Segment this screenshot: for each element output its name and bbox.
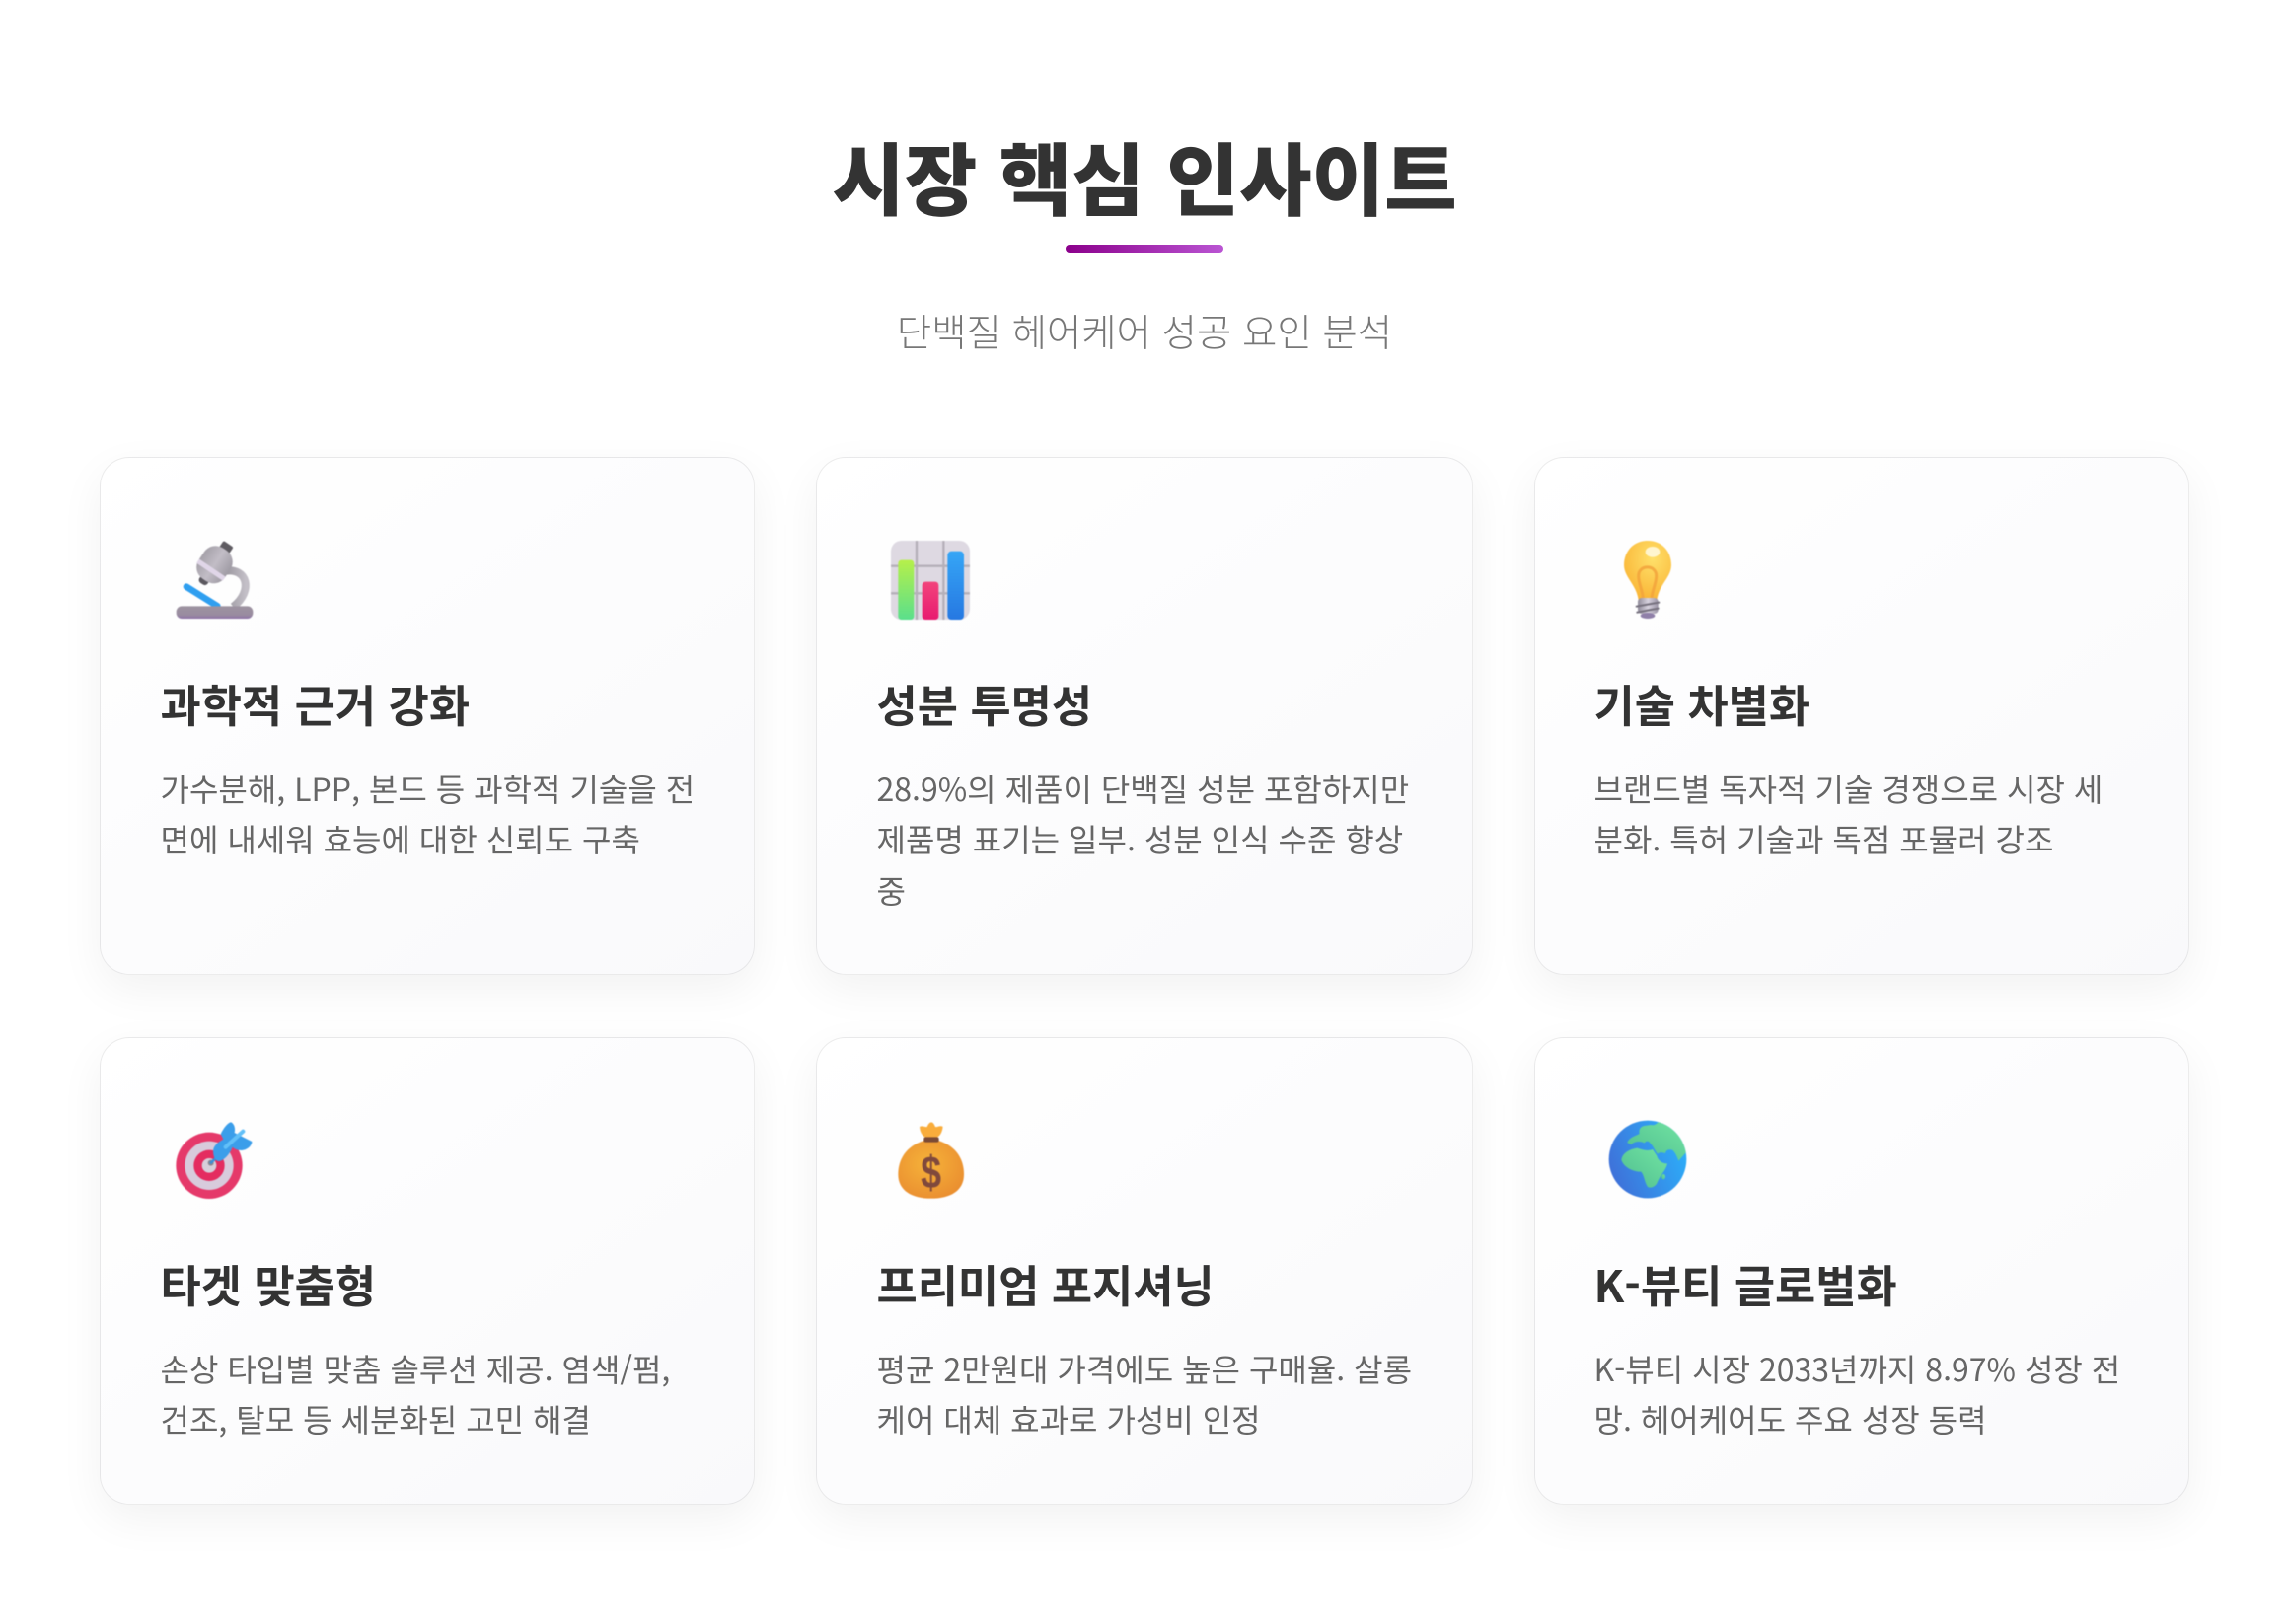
card heading: 과학적 근거 강화 [160,671,470,735]
card heading: 기술 차별화 [1594,671,1809,735]
card text [160,1346,670,1440]
card heading: 프리미엄 포지셔닝 [876,1251,1215,1315]
subtitle: 단백질 헤어케어 성공 요인 분석 [897,302,1392,357]
icon: bar chart [890,541,971,621]
panel: 성분 투명성 [816,457,1473,975]
panel: 타겟 맞춤형 [100,1037,755,1505]
icon: money bag [898,1121,965,1200]
card text: 브랜드별 독자적 기술 경쟁으로 시장 세 [1594,766,2103,811]
card text: 손상 타입별 맞춤 솔루션 제공. 염색/펌, [160,1346,670,1391]
icon: money bag: $ [922,1146,941,1198]
card text: K-뷰티 시장 2033년까지 8.97% 성장 전 [1594,1346,2120,1391]
panel: 과학적 근거 강화 [100,457,755,975]
card text: 면에 내세워 효능에 대한 신뢰도 구축 [160,816,640,861]
card text [160,766,695,861]
card heading: 성분 투명성 [876,671,1092,735]
panel: 프리미엄 포지셔닝 [816,1037,1473,1505]
card text [876,766,1409,913]
title: 시장 핵심 인사이트 [832,118,1457,233]
card text: 평균 2만원대 가격에도 높은 구매율. 살롱 [876,1346,1412,1391]
card text: 가수분해, LPP, 본드 등 과학적 기술을 전 [160,766,695,811]
icon: microscope [176,541,254,620]
card heading: 타겟 맞춤형 [160,1251,376,1315]
card text: 중 [876,867,906,913]
card text: 케어 대체 효과로 가성비 인정 [876,1395,1261,1440]
icon: light bulb [1623,540,1672,620]
card text: 망. 헤어케어도 주요 성장 동력 [1594,1395,1987,1440]
card text [1594,766,2103,861]
card text: 제품명 표기는 일부. 성분 인식 수준 향상 [876,816,1403,861]
card text [1594,1346,2120,1440]
panel: 기술 차별화 [1534,457,2189,975]
icon: globe [1608,1119,1687,1200]
card text: 28.9%의 제품이 단백질 성분 포함하지만 [876,766,1409,811]
card text: 건조, 탈모 등 세분화된 고민 해결 [160,1395,591,1440]
card text [876,1346,1412,1440]
card text: 분화. 특허 기술과 독점 포뮬러 강조 [1594,816,2053,861]
card heading: K-뷰티 글로벌화 [1594,1251,1897,1315]
panel: K-뷰티 글로벌화 [1534,1037,2189,1505]
icon: target with dart [176,1121,253,1200]
title underline [1066,245,1223,253]
